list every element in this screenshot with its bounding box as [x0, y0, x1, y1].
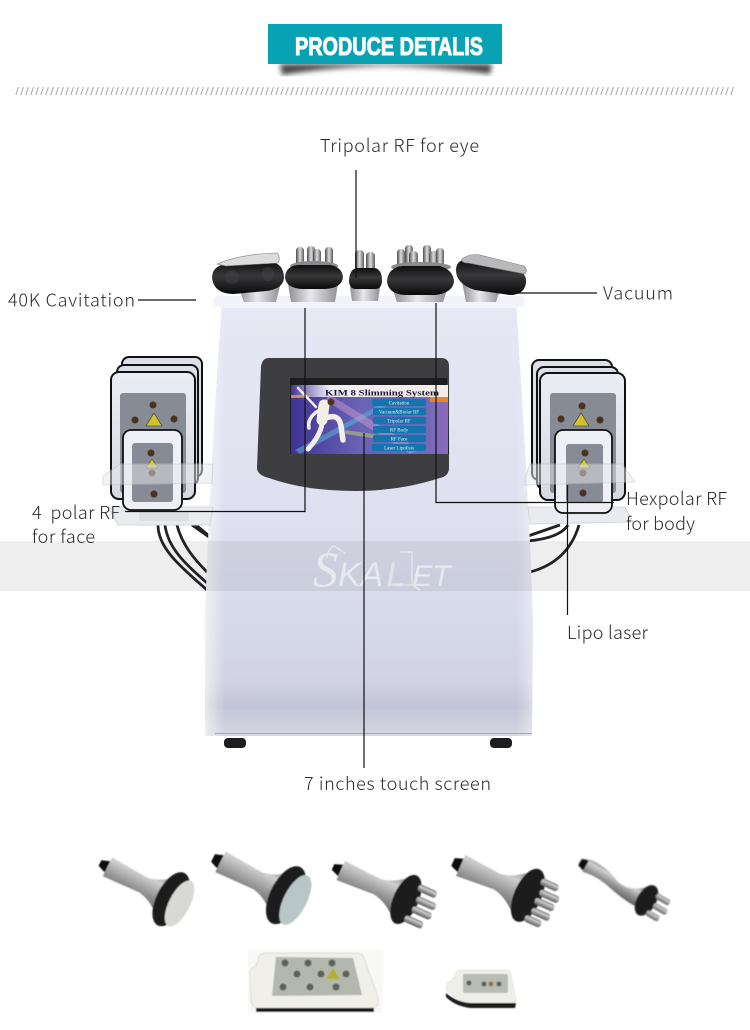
dancer figure — [298, 388, 343, 449]
callout: hexpolar RF for body: Hexpolar RF — [626, 485, 727, 511]
callout: vacuum: Vacuum — [603, 280, 673, 306]
screen menu: Vacuum&Biolar RF — [379, 410, 419, 415]
large pad panel — [120, 393, 186, 493]
callout: hexpolar RF for body — [436, 303, 727, 536]
screen menu: RF Face — [391, 437, 408, 442]
callout: 4 polar RF for face: 4 polar RF — [32, 499, 120, 525]
accessory: tripolar eye handpiece — [572, 847, 676, 927]
screen menu — [372, 399, 426, 451]
handpiece: hexpolar RF — [387, 245, 454, 302]
screen menu: RF Body — [390, 428, 409, 433]
screen title: KIM 8 Slimming System — [325, 388, 439, 398]
callout: 4 polar RF for face: for face — [32, 523, 95, 549]
glass shelf — [103, 464, 213, 485]
rear shelf — [528, 507, 633, 524]
callout: 7 inches touch screen: 7 inches touch screen — [304, 770, 491, 796]
accessory: small laser pad — [446, 970, 516, 1008]
cables — [158, 520, 579, 590]
accessory: large laser pad — [248, 950, 383, 1013]
left laser pads — [103, 357, 213, 525]
callout: hexpolar RF for body: for body — [626, 510, 695, 536]
title banner — [268, 24, 502, 75]
top lip — [213, 296, 525, 308]
screen menu: Cavitation — [389, 401, 410, 406]
handpiece: vacuum — [456, 254, 526, 302]
right laser pads — [525, 360, 635, 524]
rear shelf — [108, 507, 213, 525]
screen menu: Tripolar RF — [387, 419, 411, 424]
small pad — [555, 430, 612, 513]
title banner: PRODUCE DETALIS — [295, 33, 483, 61]
callout: lipo laser: Lipo laser — [567, 619, 649, 645]
accessory: 4 polar handpiece — [322, 843, 444, 936]
handpiece: 4 polar RF — [285, 246, 343, 302]
brand logo: SKALET — [313, 541, 453, 597]
feet — [224, 738, 246, 748]
handpiece: tripolar RF — [349, 250, 382, 301]
small pad — [123, 430, 182, 510]
glass shelf — [525, 464, 635, 485]
accessory: hexpolar handpiece — [441, 836, 567, 934]
screen menu: Laser Lipolisis — [384, 446, 414, 451]
touch screen — [290, 378, 449, 454]
accessory: vacuum handpiece — [199, 830, 320, 933]
callout: 40K cavitation: 40K Cavitation — [8, 286, 135, 312]
touch screen bezel — [257, 358, 449, 491]
callout: 4 polar RF for face — [32, 308, 305, 549]
callout: tripolar RF for eye: Tripolar RF for eye — [320, 132, 479, 158]
handpiece: cavitation — [212, 253, 284, 302]
machine — [158, 296, 579, 748]
large pad panel — [550, 393, 616, 493]
accessory: cavitation handpiece — [87, 837, 202, 934]
machine body — [205, 300, 533, 736]
